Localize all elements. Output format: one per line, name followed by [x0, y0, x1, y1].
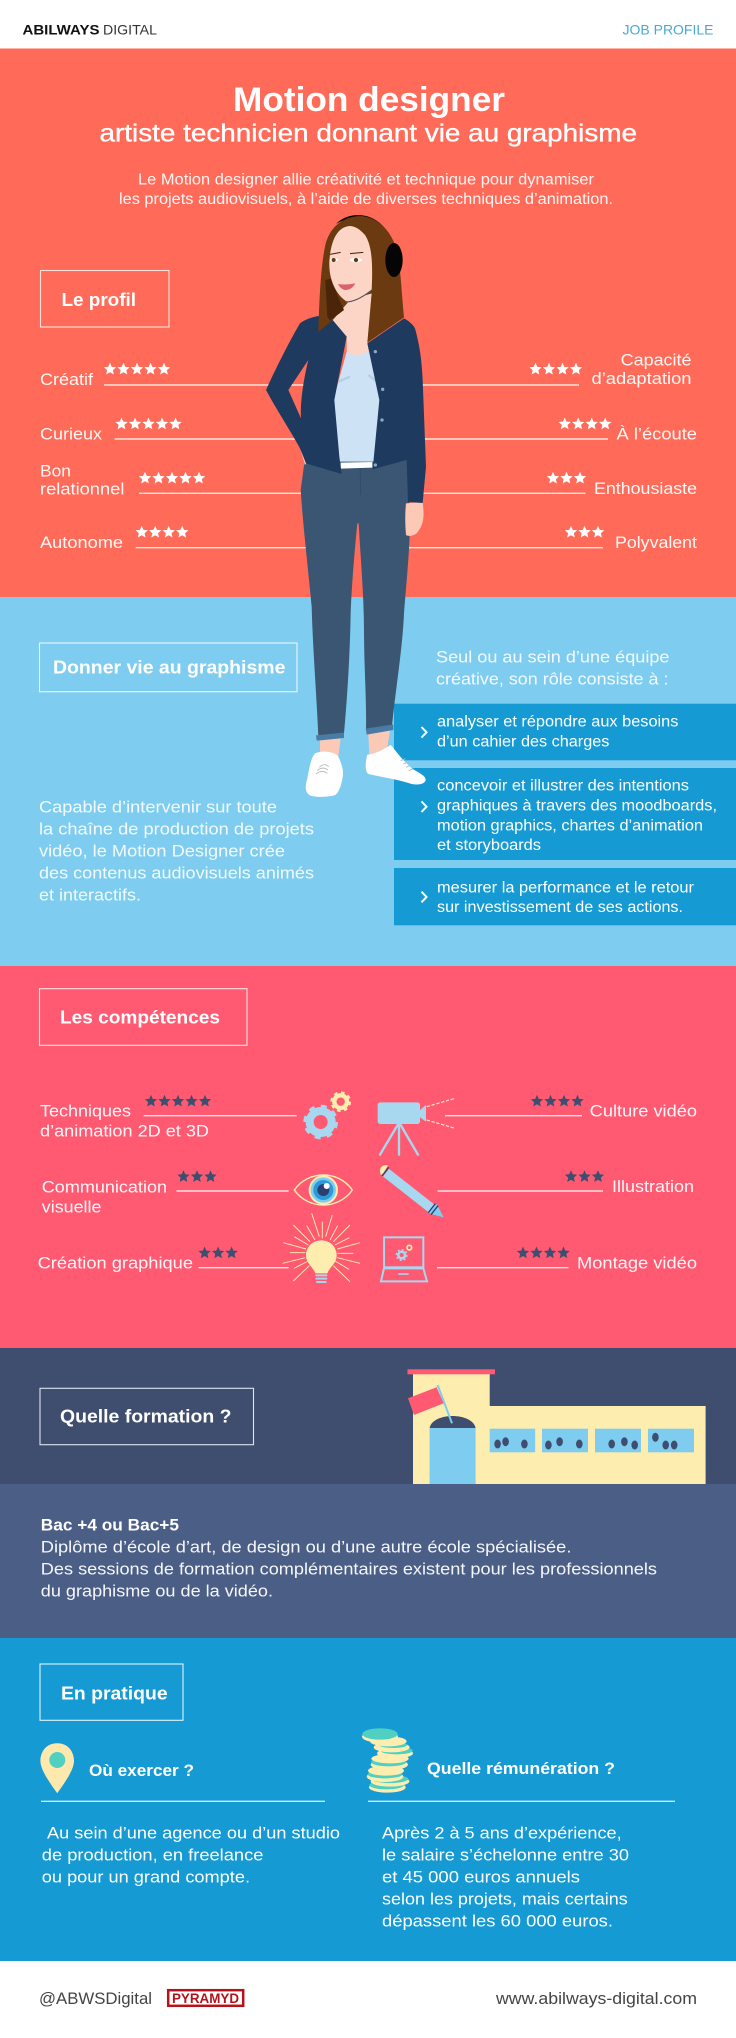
subtitle: artiste technicien donnant vie au graphisme — [100, 120, 637, 148]
heading: Le profil — [40, 270, 169, 327]
text: description: la chaîne de production de projets — [39, 819, 314, 838]
text: degree: Bac +4 ou Bac+5 — [41, 1515, 179, 1534]
heading: En pratique — [40, 1664, 183, 1720]
task box 2: et storyboards — [437, 837, 541, 854]
icon: light bulb — [283, 1213, 360, 1282]
rating rows: right: d’adaptation — [592, 369, 692, 388]
heading: En pratique: En pratique — [61, 1683, 168, 1703]
intro text: Le Motion designer allie créativité et technique pour dynamiser — [138, 171, 594, 188]
skill rows: left: Techniques — [40, 1101, 131, 1120]
twitter handle: @ABWSDigital — [39, 1989, 152, 2008]
skill rows: right: Illustration — [612, 1177, 694, 1196]
icon: eye — [294, 1175, 352, 1205]
icon: gears — [305, 1092, 350, 1138]
job profile tag: JOB PROFILE — [622, 21, 714, 37]
panel: profile — [0, 48, 736, 598]
heading: Les compétences: Les compétences — [60, 1008, 220, 1028]
text: description: des contenus audiovisuels animés — [39, 863, 314, 882]
rating rows: right: Polyvalent — [615, 533, 697, 552]
task box 2: graphiques à travers des moodboards, — [437, 798, 717, 815]
text: rémunération — [368, 1801, 675, 1931]
logo: Abilways Digital — [22, 21, 157, 37]
rating rows: right: Capacité — [621, 351, 692, 370]
icon: laptop — [381, 1237, 427, 1281]
heading: Les compétences — [40, 989, 247, 1045]
icons: skills — [283, 1092, 454, 1282]
panel: header — [0, 0, 736, 49]
logo: Abilways Digital: DIGITAL — [103, 21, 157, 37]
text: role intro — [436, 647, 670, 688]
illustration: school building — [408, 1369, 706, 1484]
legs and shoes — [301, 457, 426, 797]
panel: en pratique — [0, 1638, 736, 1961]
panel: footer — [0, 1961, 736, 2038]
skill rows: left: visuelle — [42, 1197, 101, 1216]
intro text: les projets audiovisuels, à l’aide de diverses techniques d’animation. — [119, 191, 613, 208]
text: role intro: Seul ou au sein d’une équipe — [436, 647, 670, 666]
heading: Quelle formation ? — [40, 1388, 254, 1445]
heading: Donner vie au graphisme — [40, 643, 297, 692]
task box 1: d’un cahier des charges — [437, 734, 610, 751]
task box 3: sur investissement de ses actions. — [437, 899, 683, 916]
text: training description — [41, 1538, 657, 1601]
text: description: vidéo, le Motion Designer crée — [39, 841, 285, 860]
task box 2 — [394, 768, 736, 860]
text: où exercer: Au sein d’une agence ou d’un studio — [47, 1823, 340, 1842]
text: description: et interactifs. — [39, 885, 141, 904]
text: description — [39, 797, 314, 904]
icon: coin stack — [362, 1728, 413, 1793]
task box 1 — [394, 704, 736, 760]
title: Motion designer — [233, 81, 505, 119]
heading: Le profil: Le profil — [62, 290, 136, 310]
heading: Quelle formation ?: Quelle formation ? — [60, 1407, 232, 1427]
icon: video camera — [378, 1099, 454, 1155]
text: où exercer: de production, en freelance — [42, 1845, 263, 1864]
task box 1: analyser et répondre aux besoins — [437, 714, 679, 731]
rating rows: left: Autonome — [40, 533, 123, 552]
rating rows: left: relationnel — [40, 479, 124, 498]
intro text — [119, 171, 613, 208]
rating rows: right: Enthousiaste — [594, 479, 697, 498]
task box 2: concevoir et illustrer des intentions — [437, 778, 689, 795]
rating rows: right — [408, 351, 697, 552]
skill rows: right — [437, 1095, 697, 1272]
text: où exercer: ou pour un grand compte. — [42, 1867, 250, 1886]
panel: formation details — [0, 1484, 736, 1638]
skill rows: left: Création graphique — [38, 1253, 193, 1272]
illustration: woman with headphones — [266, 215, 426, 797]
text: rémunération: le salaire s’échelonne entre 30 — [382, 1845, 629, 1864]
text: rémunération: Après 2 à 5 ans d’expérience, — [382, 1823, 622, 1842]
task box 2: motion graphics, chartes d’animation — [437, 817, 703, 834]
text: rémunération: et 45 000 euros annuels — [382, 1867, 580, 1886]
rating rows: right: À l’écoute — [616, 424, 697, 443]
task box 3 — [394, 868, 736, 925]
logo: Pyramyd: PYRAMYD — [172, 1991, 239, 2006]
logo: Abilways Digital: ABILWAYS — [22, 21, 100, 37]
panel: quelle formation — [0, 1348, 736, 1484]
task box 3: mesurer la performance et le retour — [437, 879, 694, 896]
rating rows: left: Curieux — [40, 424, 103, 443]
text: training description: Diplôme d’école d’art, de design ou d’une autre école spécialisée. — [41, 1538, 571, 1557]
skill rows: right: Montage vidéo — [577, 1253, 697, 1272]
skill rows: left: d’animation 2D et 3D — [40, 1122, 209, 1141]
subheading: Quelle rémunération ?: Quelle rémunération ? — [427, 1760, 615, 1778]
subheading: Où exercer ?: Où exercer ? — [89, 1762, 194, 1780]
text: training description: Des sessions de formation complémentaires existent pour les professionnels — [41, 1560, 657, 1579]
rating rows: left — [40, 363, 310, 552]
text: rémunération: selon les projets, mais certains — [382, 1890, 628, 1909]
website: www.abilways-digital.com — [495, 1989, 697, 2008]
rating rows: left: Créatif — [40, 370, 93, 389]
text: role intro: créative, son rôle consiste à : — [436, 669, 668, 688]
panel: donner vie au graphisme — [0, 597, 736, 966]
icon: location pin — [40, 1743, 74, 1793]
skill rows: left: Communication — [42, 1178, 167, 1197]
text: training description: du graphisme ou de la vidéo. — [41, 1582, 273, 1601]
skill rows: right: Culture vidéo — [590, 1102, 697, 1121]
panel: les compétences — [0, 966, 736, 1348]
text: où exercer — [41, 1801, 340, 1886]
skill rows: left — [38, 1095, 297, 1272]
rating rows: left: Bon — [40, 462, 71, 481]
text: description: Capable d’intervenir sur toute — [39, 797, 277, 816]
torso and head — [266, 215, 426, 503]
heading: Donner vie au graphisme: Donner vie au graphisme — [53, 657, 285, 677]
icon: pencil — [380, 1165, 444, 1217]
text: rémunération: dépassent les 60 000 euros. — [382, 1912, 613, 1931]
